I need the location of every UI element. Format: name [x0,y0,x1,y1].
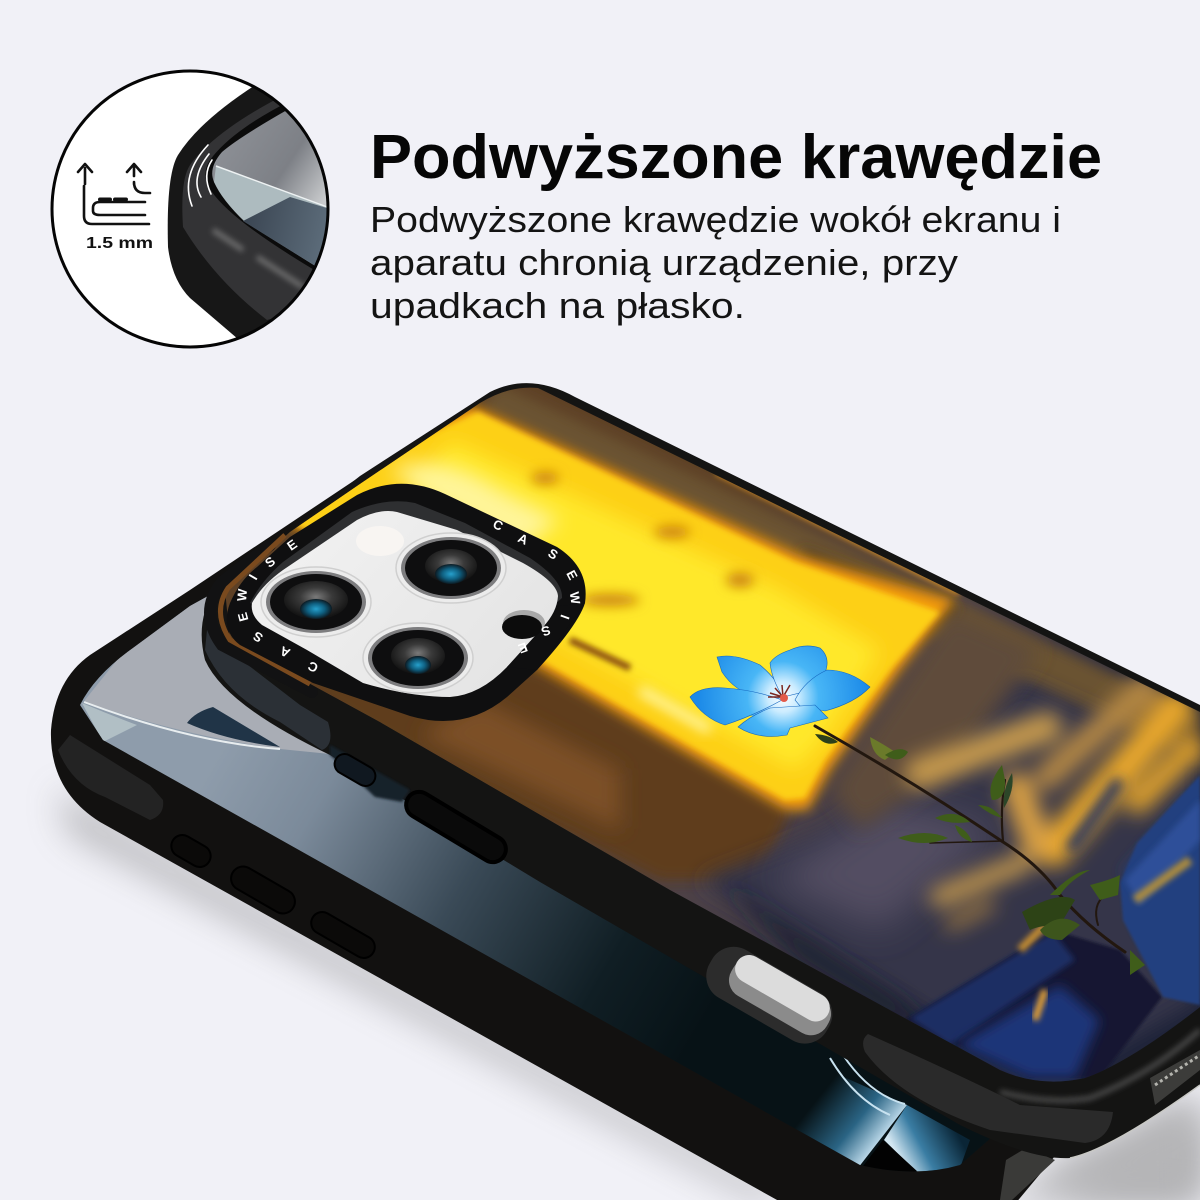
CASEWISE ring text: E [516,639,530,657]
front phone charging port [697,938,842,1053]
camera module [210,484,586,721]
inset: phone corner close-up [168,87,326,338]
back phone case frame [51,470,1060,1200]
title: Podwyższone krawędzie [370,123,1102,192]
label: 1.5 mm: 1.5 mm [86,235,153,252]
front phone carbon patch left [205,620,330,750]
front phone mic [331,750,379,790]
CASEWISE ring text: A [277,643,292,661]
CASEWISE ring text: I [557,613,573,621]
CASEWISE ring text: C [491,516,506,534]
CASEWISE ring text: W [234,588,250,602]
lidar sensor [502,610,545,639]
front phone side button [401,787,511,867]
lens left [261,567,371,637]
CASEWISE ring text: S [250,628,266,646]
frame highlight [1000,1030,1200,1100]
back phone screen [80,596,990,1172]
CASEWISE ring text [234,516,583,676]
flower [690,646,870,736]
CASEWISE ring text: E [563,568,581,583]
wallpaper muted blue-grey [700,680,1200,1085]
front phone body [202,383,1200,1158]
CASEWISE ring text: I [246,572,260,582]
CASEWISE ring text: A [516,530,531,548]
CASEWISE ring text: W [567,591,583,606]
wallpaper tan beside yellow [830,610,1040,830]
wallpaper orange halo [250,405,955,810]
wallpaper yellow glow [260,412,940,800]
CASEWISE ring text: S [262,553,278,571]
wallpaper pale highlight [390,463,560,550]
front phone [202,383,1200,1158]
flash [356,526,404,556]
inset: screen [212,111,326,266]
inset: impact arcs [188,145,212,206]
phone shadow [60,790,1200,1200]
wallpaper dark orange spots [531,472,754,606]
camera plateau [252,511,558,697]
description text [370,199,1061,326]
CASEWISE ring text: S [539,622,553,640]
CASEWISE ring text: E [284,536,300,554]
front phone bottom white rim [1070,1085,1200,1158]
icon: raised edge diagram [78,164,150,224]
flower stamens [768,685,790,702]
camera ring [227,484,586,721]
wallpaper dark brown block [804,548,956,628]
front phone carbon patch right [863,1034,1113,1143]
camera frame bulge edge [210,545,312,692]
back phone corner carbon patch [58,735,163,820]
back phone side buttons [167,831,379,962]
back phone bottom port [1000,1148,1055,1200]
raised edge inset circle [51,60,340,348]
CASEWISE ring text: S [545,545,561,563]
description text: aparatu chronią urządzenie, przy [370,242,959,283]
lens top right [396,533,506,603]
wallpaper rocks [905,775,1200,1078]
back phone wallpaper light curves [798,1058,970,1172]
lens bottom [363,623,473,693]
wallpaper orange rim [717,471,960,592]
plant stem [815,726,1125,952]
CASEWISE ring text: C [305,658,320,676]
wallpaper base [200,380,1200,1100]
wallpaper golden streaks [920,687,1193,925]
description text: Podwyższone krawędzie wokół ekranu i [370,199,1061,240]
camera ring inner wall [250,501,562,697]
front phone speaker grille [1150,1050,1200,1105]
back phone [51,470,1060,1200]
wallpaper brown band at top [480,385,1200,770]
CASEWISE ring text: E [235,611,251,623]
ring overlap over lidar [507,603,585,670]
front phone navy side [330,745,410,802]
plant leaves [815,734,1145,975]
wallpaper lower brown [310,674,794,887]
camera left wallpaper sliver [220,535,310,684]
wallpaper: sunset and flower [200,380,1200,1100]
description text: upadkach na płasko. [370,285,745,326]
